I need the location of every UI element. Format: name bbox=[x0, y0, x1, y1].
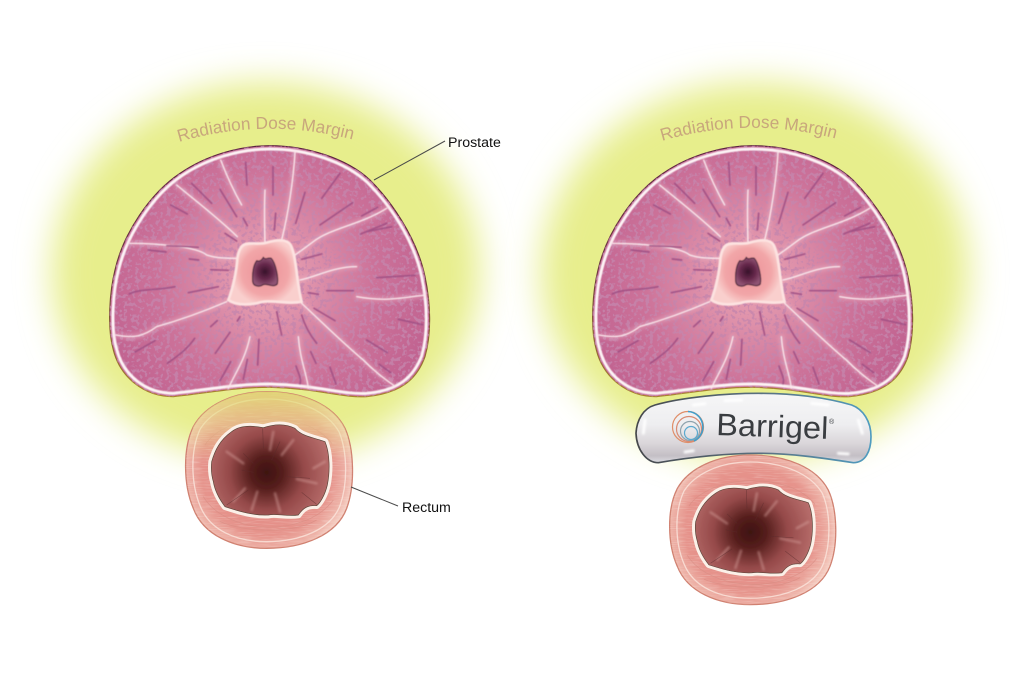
spacer gel body bbox=[636, 393, 871, 463]
registered mark: ® bbox=[829, 418, 835, 426]
right prostate illustration bbox=[590, 143, 916, 400]
right radiation glow bbox=[541, 82, 969, 462]
Barrigel spacer bbox=[636, 393, 871, 463]
left radiation glow bbox=[52, 82, 480, 462]
heading: left radiation dose margin: Radiation Dose Margin bbox=[177, 117, 354, 142]
left rectum illustration bbox=[183, 390, 357, 550]
label: Rectum: Rectum bbox=[402, 500, 451, 516]
icon: Barrigel concentric logo bbox=[672, 412, 704, 442]
label: Prostate bbox=[374, 135, 501, 180]
Barrigel wordmark: Barrigel bbox=[716, 407, 829, 446]
left prostate illustration bbox=[107, 143, 433, 400]
label: Prostate: Prostate bbox=[448, 135, 501, 151]
label: Rectum bbox=[351, 487, 451, 516]
right rectum illustration bbox=[667, 453, 840, 606]
heading: right radiation dose margin: Radiation Dose Margin bbox=[660, 116, 836, 140]
